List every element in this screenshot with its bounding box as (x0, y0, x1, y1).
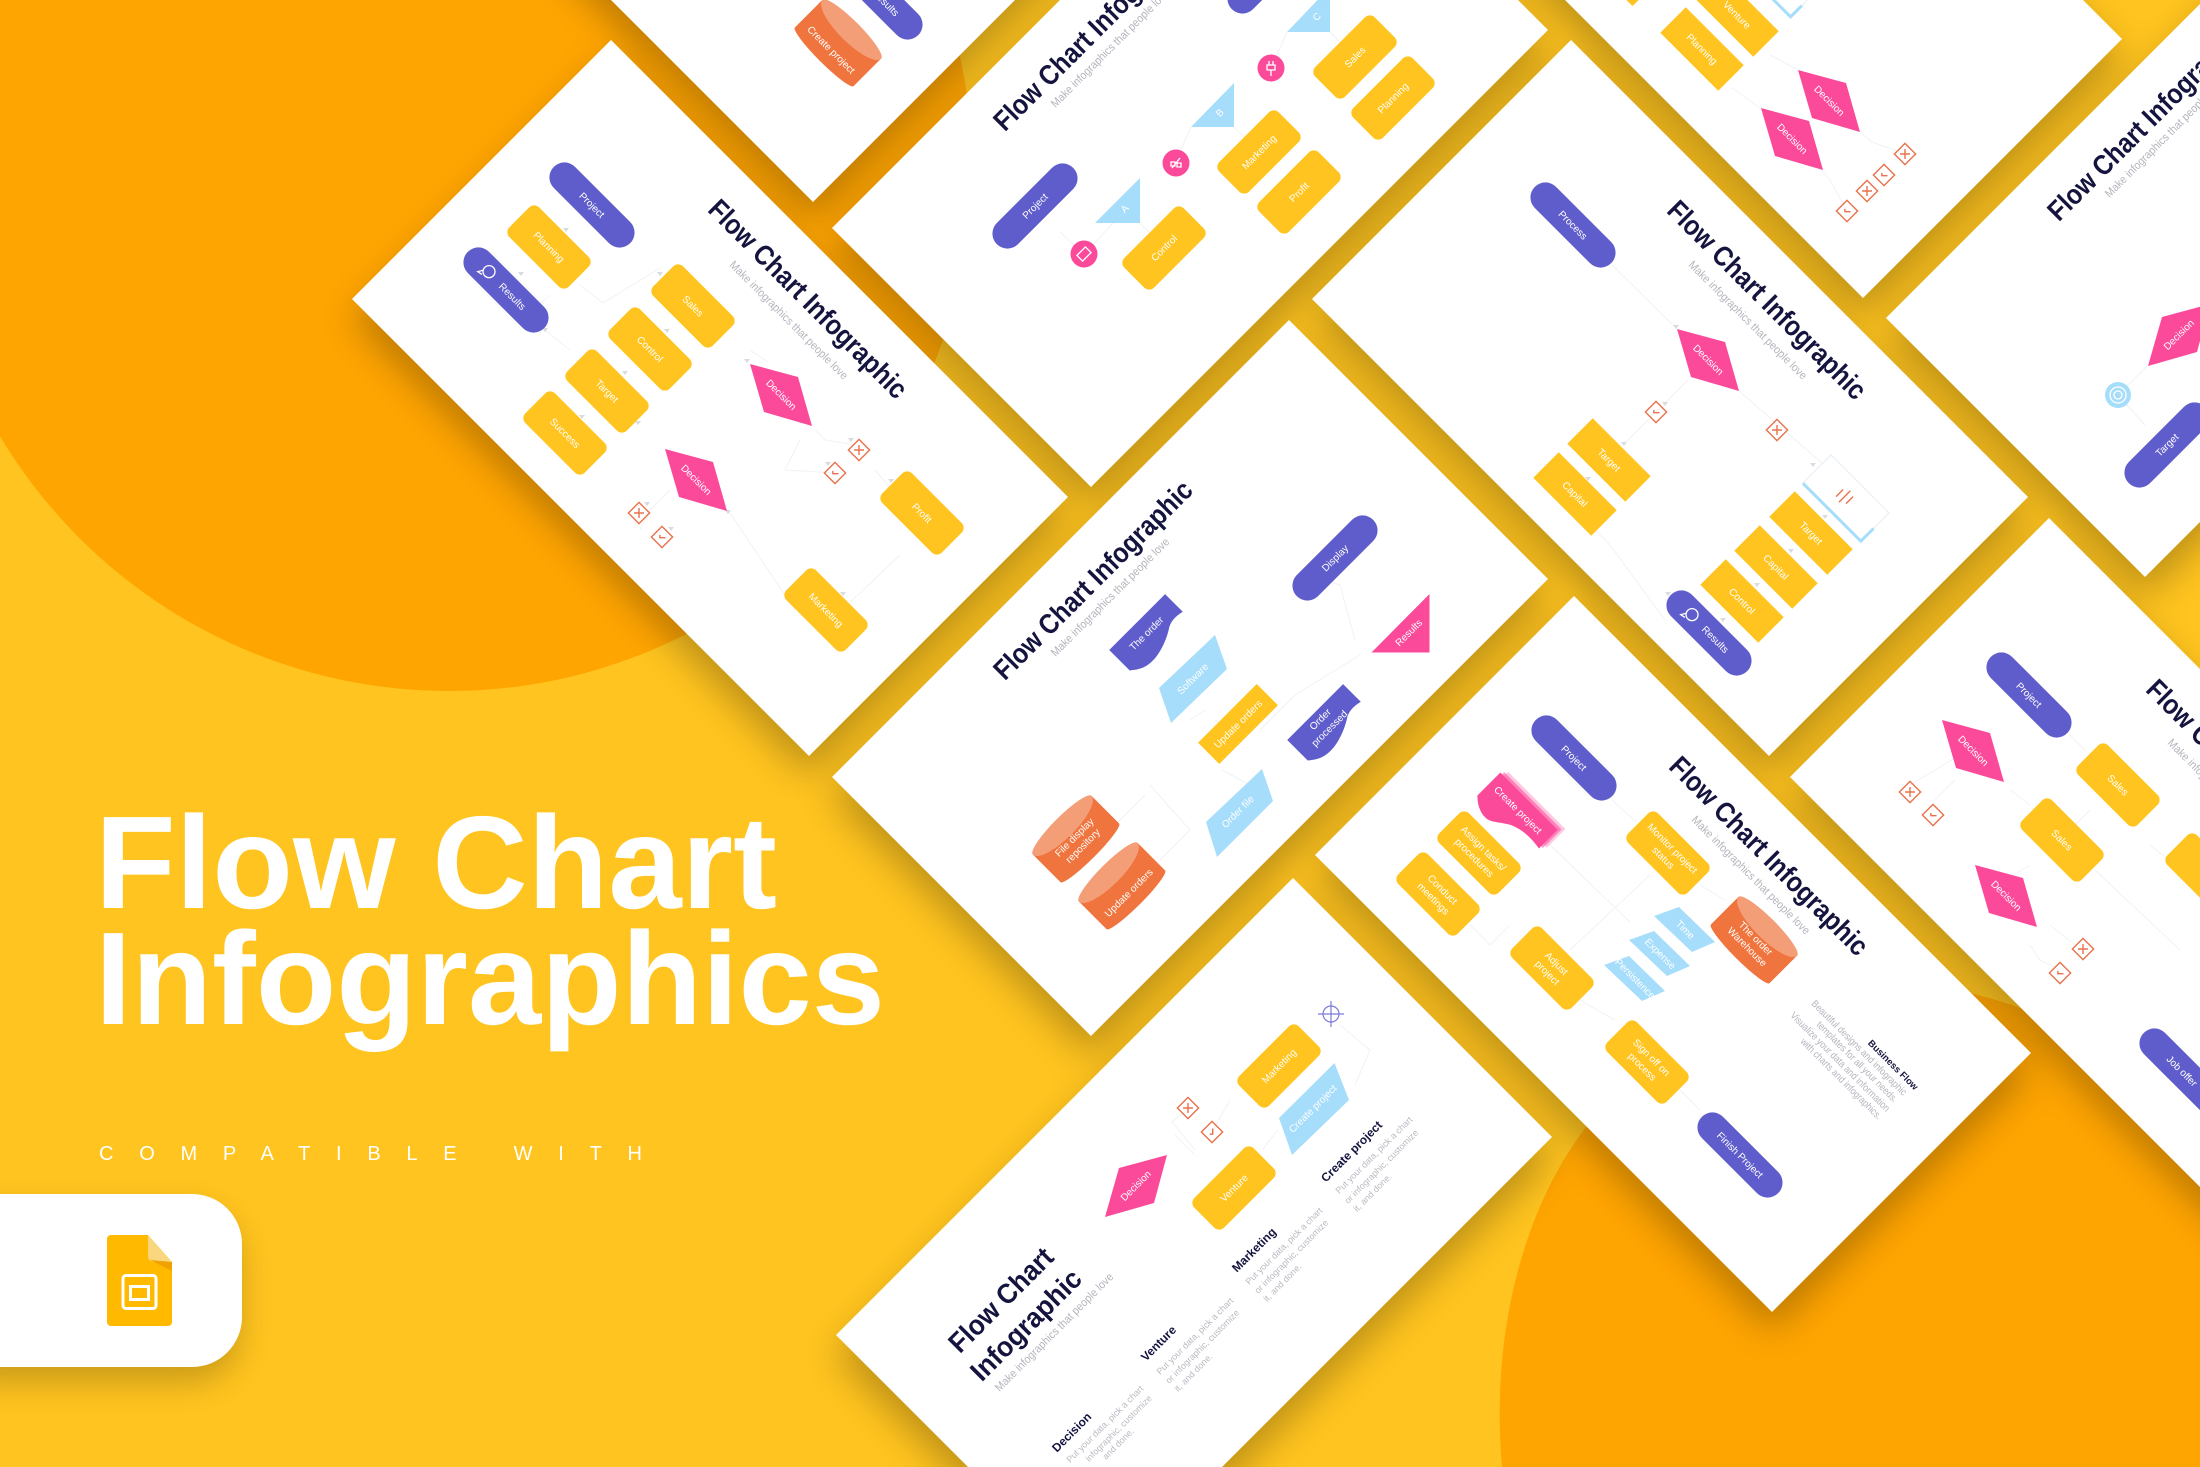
rect: control: Control (1149, 233, 1180, 264)
connectors (1590, 265, 1830, 620)
icon: check (2049, 962, 2071, 984)
rect: conduct meetings (1393, 849, 1483, 939)
parallelogram: time (1654, 907, 1715, 952)
pill: project (543, 156, 641, 254)
parallelogram: persistence: Persistence (1612, 957, 1657, 1002)
diamond: decision: Decision (2162, 318, 2197, 353)
title line 2: Infographic (964, 1263, 1088, 1387)
subtitle: Make infographics that people love (993, 1271, 1116, 1394)
panel: top partial card with cylinder (356, 0, 1072, 202)
icon: cross (1177, 1097, 1199, 1119)
rect: assign tasks: procedures (1452, 837, 1495, 880)
wave: order processed (1287, 684, 1370, 767)
column paragraph: Put your data, pick a chart (1243, 1205, 1325, 1287)
rect: planning (1660, 7, 1744, 91)
title: Flow Chart Infographic (702, 193, 914, 405)
column: venture (1138, 1295, 1241, 1394)
cylinder: file display repository (1027, 790, 1123, 886)
pill: results: Results (496, 281, 527, 313)
icon: cross (1856, 180, 1878, 202)
card background (832, 320, 1548, 1036)
rect: marketing (1234, 1021, 1324, 1111)
rect: control (1119, 203, 1209, 293)
pill: project (1525, 709, 1623, 807)
icon: check (651, 526, 673, 548)
rect: sales 1 (2073, 740, 2163, 830)
rect: marketing: Marketing (1260, 1047, 1299, 1086)
column heading: Venture (1138, 1323, 1179, 1364)
icon: plug circle (1258, 54, 1284, 82)
rect: profit (1254, 147, 1344, 237)
pill: project: Project (1558, 744, 1588, 774)
pill: process (1524, 176, 1622, 274)
card background (356, 0, 1072, 202)
pill: finish project: Finish Project (1714, 1130, 1765, 1181)
column paragraph: it, and done. (1172, 1351, 1215, 1394)
rect: adjust project (1507, 923, 1597, 1013)
cylinder: update orders (1073, 837, 1169, 933)
icon: google slides file (107, 1235, 172, 1326)
icon: check (1645, 401, 1667, 423)
pill: results (457, 241, 555, 339)
rect: sign off on process: process (1625, 1051, 1658, 1084)
rect: adjust project: Adjust (1542, 950, 1570, 978)
rect: target: Target (1797, 520, 1824, 548)
rect: update orders: Update orders (1212, 698, 1265, 751)
badge (0, 1194, 242, 1367)
rect: planning (504, 202, 594, 292)
diamond: decision 2: Decision (1774, 122, 1809, 157)
rect: profit (877, 468, 967, 558)
icon: check (1873, 164, 1895, 186)
rect: success: Success (547, 416, 582, 451)
connectors (1110, 575, 1360, 860)
pill: results: Results (1699, 624, 1730, 656)
triangle: results (1372, 594, 1430, 652)
main title: Flow Chart (95, 789, 777, 936)
panel: process flow chart card (1312, 40, 2028, 756)
rect: profit: Profit (1288, 180, 1312, 205)
rect: marketing (1214, 107, 1304, 197)
arrow heads (518, 228, 894, 596)
triangle C: C (1311, 11, 1324, 24)
pill: display (1286, 509, 1384, 607)
rect: sales: Sales (680, 294, 705, 319)
column heading: Marketing (1229, 1225, 1279, 1275)
outlined box with icon (1803, 455, 1889, 541)
diamond: decision 2 (1975, 865, 2037, 927)
main title: Infographics (95, 905, 885, 1052)
panel: left flow chart card (352, 40, 1068, 756)
diamond: decision 2 (665, 449, 727, 511)
column paragraph: Put your data, pick a chart (1064, 1383, 1146, 1465)
rect: target (562, 346, 652, 436)
pill: display: Display (1320, 543, 1351, 574)
diamond: decision (2148, 304, 2200, 366)
title: Flow Chart Infographic (987, 474, 1199, 686)
subtitle: Make infographics that people love (1686, 259, 1809, 382)
parallelogram: create project: Create project (1287, 1083, 1340, 1135)
pill: results (1660, 584, 1758, 682)
rect: planning: Planning (1684, 32, 1719, 67)
rect: control (1700, 559, 1784, 643)
rect: planning: Planning (531, 230, 566, 265)
paragraph: line 1: Beautiful designs and infographic (1809, 999, 1908, 1098)
rect: conduct meetings: meetings (1414, 881, 1451, 918)
heading: flow chart infographic (942, 1241, 1088, 1387)
cylinder: create project: Create project (804, 24, 857, 77)
panel: bottom card with column text (836, 878, 1552, 1467)
rect: conduct meetings: Conduct (1425, 873, 1459, 907)
title line 1: Flow Chart (942, 1241, 1060, 1359)
white badge with Google Slides icon (0, 1194, 242, 1367)
diamond: decision 2 (1761, 108, 1823, 170)
icon: check (1201, 1121, 1223, 1143)
pill: project: Project (576, 191, 606, 221)
cylinder: the order warehouse (1707, 891, 1803, 987)
diamond: decision 1: Decision (1955, 734, 1990, 769)
rect: target (1769, 491, 1853, 575)
pill: project (986, 157, 1084, 255)
wave: the order (1109, 594, 1192, 677)
diamond: decision: Decision (1690, 343, 1725, 378)
connectors (522, 268, 900, 610)
pill: project: Project (1021, 192, 1051, 222)
connectors (1060, 32, 1355, 254)
parallelogram: expense: Expense (1642, 937, 1678, 972)
subtitle: Make infographics that people love (1049, 536, 1172, 659)
rect: sales 2: Sales (2049, 828, 2074, 853)
connectors (1910, 735, 2180, 970)
badge shadow (0, 1210, 240, 1383)
column: decision (1049, 1383, 1154, 1465)
cylinder: file display repository: repository (1064, 827, 1103, 866)
main title (95, 789, 885, 1052)
card background (352, 40, 1068, 756)
rect: update orders (1198, 684, 1278, 764)
column heading: Create project (1318, 1118, 1385, 1185)
compatible with label: COMPATIBLE WITH (99, 1143, 642, 1165)
pill: target (2118, 396, 2200, 494)
rect: marketing: Marketing (806, 591, 845, 630)
rect: marketing: Marketing (1240, 133, 1279, 172)
rect: planning (1348, 53, 1438, 143)
rect: marketing (781, 565, 871, 655)
wave: order processed: Order (1308, 706, 1334, 733)
icon: fingerprint circle (2105, 382, 2131, 408)
rect: venture (1189, 1143, 1279, 1233)
triangle A: A (1119, 203, 1132, 216)
rect: control: Control (634, 334, 665, 365)
pill: project: Project (2013, 681, 2043, 711)
rect: venture: Venture (1219, 1172, 1251, 1205)
rect: top partial (1576, 0, 1660, 6)
icon: check (824, 462, 846, 484)
triangle C (1287, 0, 1330, 32)
pill: target: Target (2154, 432, 2182, 459)
rect: venture: Venture (1720, 0, 1753, 32)
triangle A (1095, 178, 1140, 223)
triangle B (1191, 83, 1234, 127)
diamond: decision (1105, 1155, 1167, 1217)
pill: job offer: Job offer (2164, 1054, 2199, 1090)
pill: finish project (1691, 1106, 1789, 1204)
diamond: decision: Decision (1119, 1169, 1154, 1204)
rect: planning: Planning (1376, 81, 1411, 116)
rect: target: Target (1595, 447, 1622, 475)
rect: sales 2 (2017, 795, 2107, 885)
diamond: decision (1677, 329, 1739, 391)
icon: laptop circle (1070, 240, 1098, 268)
icon: cross (1766, 419, 1788, 441)
connectors (1470, 800, 1725, 1110)
diamond: decision 2: Decision (678, 463, 713, 498)
parallelogram: order file: Order file (1220, 794, 1257, 831)
subtitle: Make infographics that people love (1689, 814, 1812, 937)
cylinder: update orders: Update orders (1103, 867, 1156, 920)
diamond: decision 1 (750, 364, 812, 426)
diamond: decision 1: Decision (1811, 84, 1846, 119)
rect: partial right (2162, 830, 2200, 920)
paragraph: line 3: Visualize your data and information (1788, 1010, 1892, 1114)
column paragraph: or infographic, customize (1252, 1218, 1330, 1296)
rect: capital: Capital (1760, 553, 1790, 583)
diamond: decision 1 (1798, 70, 1860, 132)
subtitle: Make infographics that people love (727, 259, 850, 382)
panel: right top card (1886, 0, 2200, 577)
decorative orange blob bottom right (1500, 986, 2200, 1467)
column paragraph: it, and done. (1261, 1261, 1304, 1304)
icon: cross (1894, 143, 1916, 165)
icon: cross (1899, 781, 1921, 803)
column paragraph: Put your data, pick a chart (1333, 1114, 1415, 1196)
cylinder: create project (791, 0, 887, 90)
rect: target (1567, 418, 1651, 502)
rect: capital (1734, 525, 1818, 609)
column heading: Decision (1049, 1410, 1094, 1455)
rect: capital (1533, 452, 1617, 536)
rect: sales (648, 261, 738, 351)
panel: right lower flow chart card (1790, 518, 2200, 1234)
column paragraph: infographic, customize (1083, 1393, 1154, 1464)
connectors (1732, 55, 1905, 211)
rect: success (520, 388, 610, 478)
panel: bottom centre business flow card (1315, 596, 2031, 1312)
diamond: decision 1 (1942, 720, 2004, 782)
column: marketing (1229, 1205, 1330, 1304)
parallelogram: time: Time (1673, 919, 1697, 942)
icon: people circle (1162, 150, 1190, 176)
icon: check (1922, 804, 1944, 826)
heading: business flow: Business Flow (1865, 1038, 1920, 1093)
decorative orange circle top left (0, 0, 972, 691)
card background (1315, 596, 2031, 1312)
pill: process: Process (1556, 209, 1589, 242)
card background (1886, 0, 2200, 577)
card background (1406, 0, 2122, 298)
diamond: decision 1: Decision (763, 378, 798, 413)
outlined box partial (1731, 0, 1819, 17)
rect: sales (1310, 12, 1400, 102)
icon: cross (2072, 938, 2094, 960)
rect: assign tasks: Assign tasks/ (1458, 824, 1508, 874)
rect: sales: Sales (1343, 45, 1368, 70)
wave stack: create project: Create project (1491, 785, 1544, 837)
rect: monitor project status (1623, 808, 1713, 898)
icon: cross (628, 502, 650, 524)
pill: job offer (2133, 1022, 2200, 1120)
rect: control: Control (1726, 586, 1757, 617)
triangle: results: Results (1394, 618, 1425, 649)
parallelogram: software: Software (1176, 661, 1212, 697)
column paragraph: Put your data, pick a chart (1154, 1295, 1236, 1377)
cylinder: the order warehouse: Warehouse (1725, 926, 1769, 970)
rect: adjust project: project (1532, 959, 1561, 988)
rect: sign off on process (1602, 1017, 1692, 1107)
panel: centre flow chart card (832, 320, 1548, 1036)
column paragraph: or infographic, customize (1163, 1308, 1241, 1386)
parallelogram: expense (1629, 931, 1690, 976)
column paragraph: it, and done. (1351, 1171, 1394, 1214)
icon: check (1836, 200, 1858, 222)
connectors (2118, 366, 2147, 425)
card background (1312, 40, 2028, 756)
pill: results (831, 0, 929, 46)
wave: order processed: processed (1310, 709, 1350, 749)
panel: top centre flow chart card (832, 0, 1548, 487)
rect: capital: Capital (1559, 480, 1589, 510)
column paragraph: and done. (1100, 1426, 1136, 1462)
pill: top partial (1221, 0, 1319, 20)
title: Flow Chart Infographic (1663, 750, 1875, 962)
rect: sign off on process: Sign off on (1630, 1037, 1672, 1079)
wave: the order: The order (1128, 614, 1167, 653)
parallelogram: software (1159, 635, 1227, 723)
arrow heads (1585, 325, 1828, 622)
rect: sales 1: Sales (2105, 773, 2130, 798)
cylinder: the order warehouse: The order (1736, 920, 1775, 959)
rect: target: Target (593, 378, 620, 406)
connectors (1172, 1025, 1370, 1155)
icon: cross (848, 439, 870, 461)
rect: monitor project status: status (1649, 845, 1676, 872)
paragraph: line 4: with charts and infographics. (1797, 1036, 1883, 1122)
card background (1790, 518, 2200, 1234)
rect: control (605, 304, 695, 394)
diamond: decision 2: Decision (1988, 879, 2023, 914)
rect: monitor project status: Monitor project (1645, 822, 1699, 877)
panel: top right card with decisions (1406, 0, 2122, 298)
text block: business flow (1788, 999, 1920, 1122)
icon: target crosshair (1318, 1001, 1344, 1027)
card background (832, 0, 1548, 487)
wave stack: create project (1470, 768, 1565, 863)
parallelogram: create project (1279, 1063, 1349, 1155)
pill: project (1980, 646, 2078, 744)
column paragraph: or infographic, customize (1342, 1128, 1420, 1206)
column: create project (1318, 1114, 1420, 1214)
paragraph: line 2: templates for all your needs. (1814, 1020, 1899, 1105)
cylinder: file display repository: File display (1053, 816, 1097, 860)
parallelogram: order file (1206, 769, 1273, 857)
card background (836, 878, 1552, 1467)
rect: assign tasks (1434, 808, 1524, 898)
title: Flow Chart Infographic (1661, 194, 1873, 406)
triangle B: B (1214, 107, 1227, 120)
rect: profit: Profit (909, 502, 934, 526)
rect: venture (1695, 0, 1779, 57)
